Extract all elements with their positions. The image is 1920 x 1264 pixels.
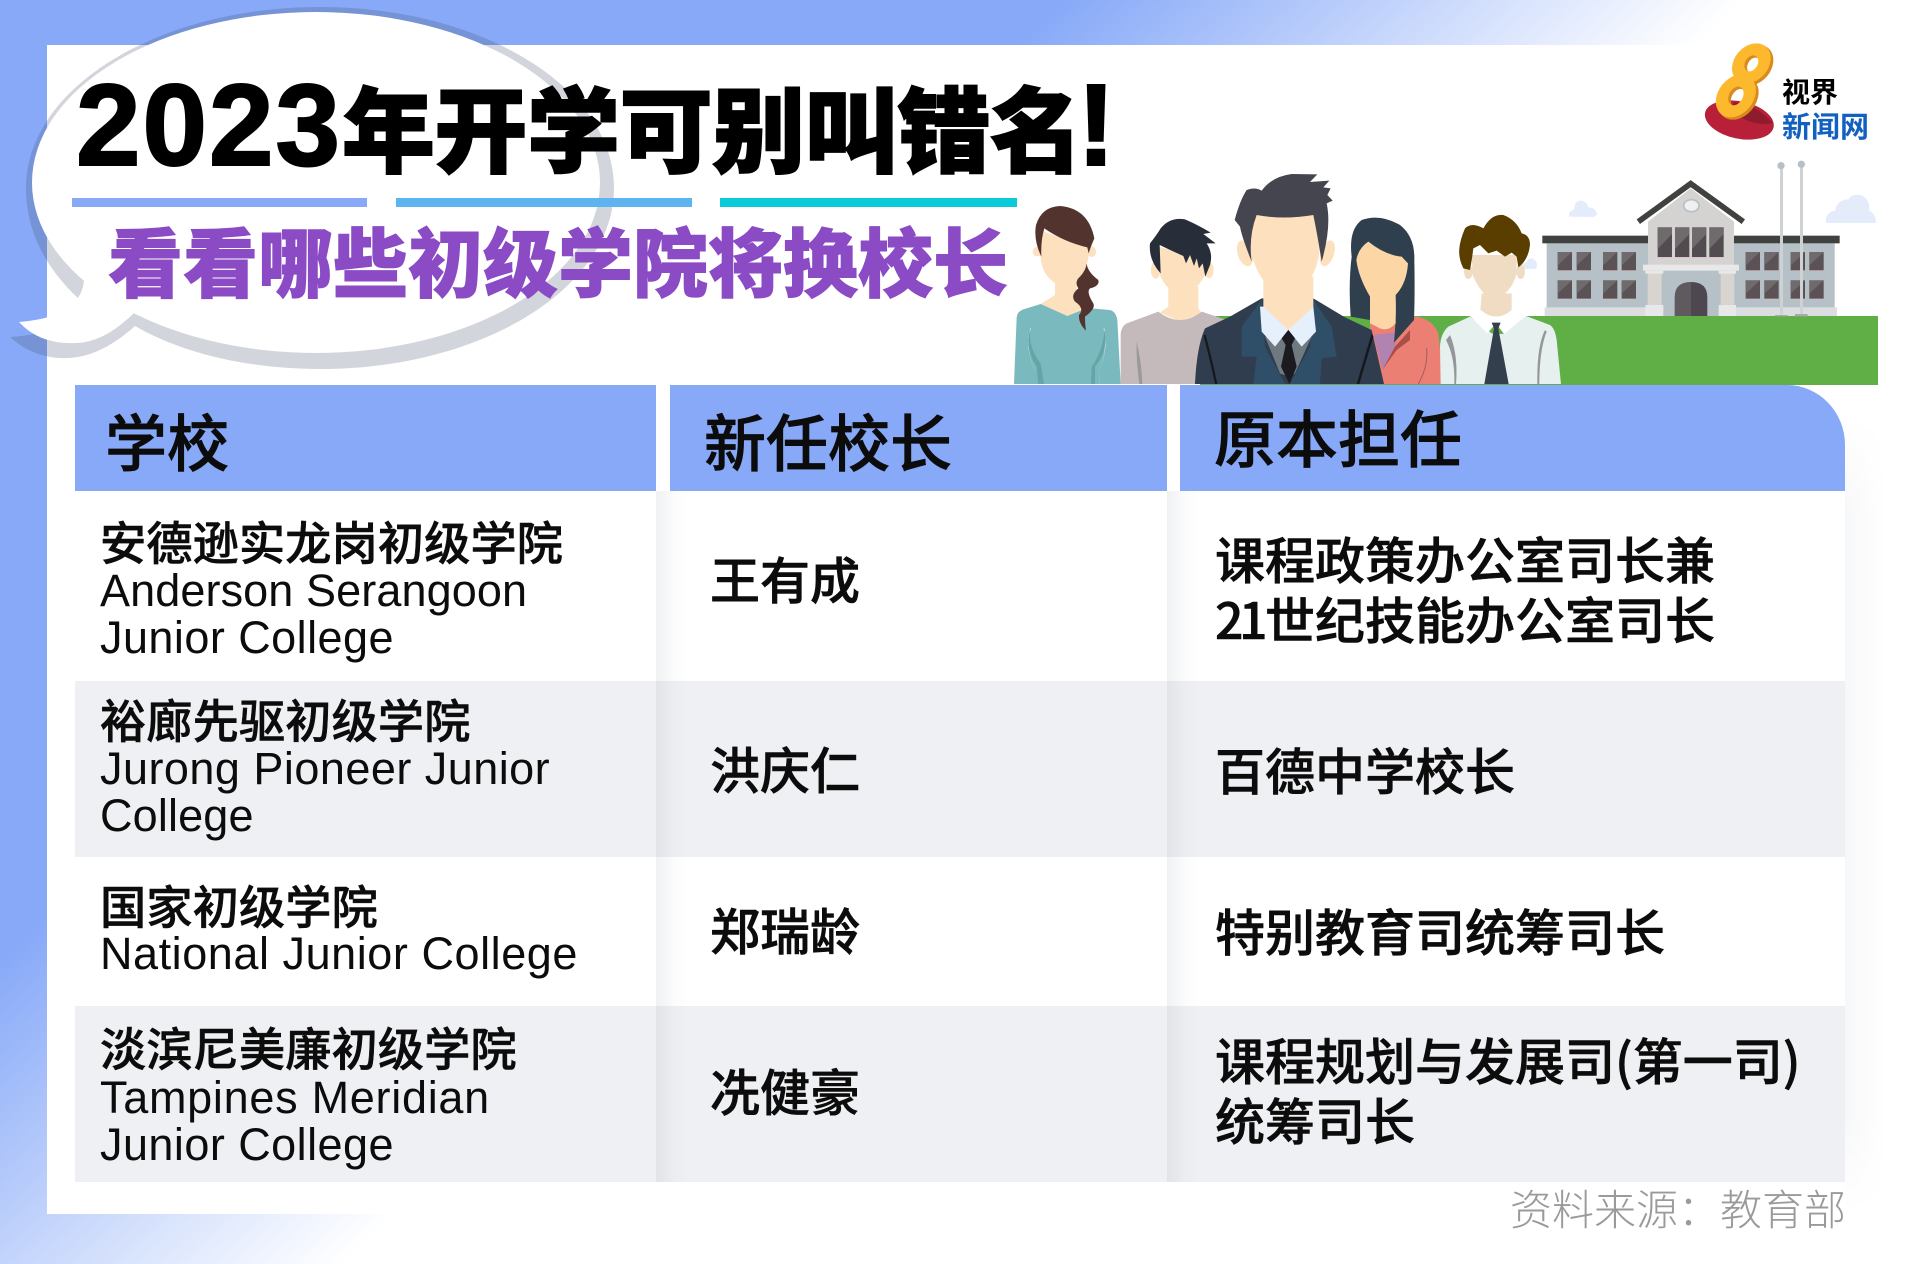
title: 2023年开学可别叫错名! (76, 58, 1115, 192)
row 1 school (100, 507, 563, 663)
logo text: xinwenwang: 新闻网 (1782, 104, 1869, 146)
speech bubble (10, 7, 614, 369)
subtitle: 看看哪些初级学院将换校长 (108, 204, 1008, 313)
row 3 school (100, 871, 578, 979)
person: man in dark suit (1195, 174, 1384, 384)
logo text: shijie: 视界 (1782, 71, 1838, 111)
row 2 school: College (100, 790, 254, 841)
row 3 school: 国家初级学院 (100, 871, 378, 938)
row 1 previous post: 21世纪技能办公室司长 (1215, 582, 1715, 654)
source note: 资料来源：教育部 (1510, 1177, 1846, 1238)
row 2 principal: 洪庆仁 (710, 732, 860, 804)
row 4 previous post: 课程规划与发展司(第一司) (1215, 1023, 1801, 1095)
row 4 principal: 冼健豪 (710, 1054, 860, 1126)
row 4 school: 淡滨尼美廉初级学院 (100, 1013, 517, 1080)
row 4 previous post (1215, 1023, 1801, 1155)
row 3 previous post: 特别教育司统筹司长 (1215, 894, 1665, 966)
school building (1522, 161, 1876, 316)
row 2 school (100, 685, 550, 841)
row 2 school: Jurong Pioneer Junior (100, 743, 550, 794)
person: man in grey shirt (1121, 219, 1227, 384)
row 1 school: Anderson Serangoon (100, 565, 527, 616)
row 1 principal: 王有成 (710, 542, 860, 614)
header cell: new principal (670, 385, 1167, 491)
row 3 school: National Junior College (100, 928, 578, 979)
header label: school: 学校 (105, 394, 229, 484)
table (75, 385, 1846, 1182)
row 1 school: 安德逊实龙岗初级学院 (100, 507, 563, 574)
row 4 school: Tampines Meridian (100, 1072, 490, 1123)
row 4 previous post: 统筹司长 (1215, 1083, 1415, 1155)
header label: new principal: 新任校长 (704, 394, 952, 484)
lawn (1200, 316, 1878, 385)
header label: previous post: 原本担任 (1214, 390, 1462, 480)
row 2 school: 裕廊先驱初级学院 (100, 685, 470, 752)
row 3 principal: 郑瑞龄 (710, 893, 860, 965)
row 2 previous post: 百德中学校长 (1215, 733, 1515, 805)
row 1 previous post (1215, 522, 1715, 654)
row 1 previous post: 课程政策办公室司长兼 (1215, 522, 1715, 594)
illustration: lawn and school building (1014, 160, 1878, 385)
header cell: school (75, 385, 656, 491)
person: woman with wavy hair (1014, 206, 1121, 384)
person: man in white shirt and tie (1440, 215, 1561, 384)
logo emblem: golden 8 on red disc (1704, 43, 1774, 140)
title underline bars (72, 198, 1017, 207)
table header bar (75, 385, 1845, 491)
right edge shadow (1845, 512, 1846, 1118)
row 4 school (100, 1013, 517, 1170)
row 4 school: Junior College (100, 1119, 394, 1170)
column separator shadows (656, 491, 1178, 1182)
row 1 school: Junior College (100, 612, 394, 663)
logo (1704, 43, 1869, 146)
row backgrounds (75, 681, 1845, 1182)
header cell: previous post (1180, 385, 1845, 491)
person: woman in coral jacket (1350, 218, 1443, 384)
